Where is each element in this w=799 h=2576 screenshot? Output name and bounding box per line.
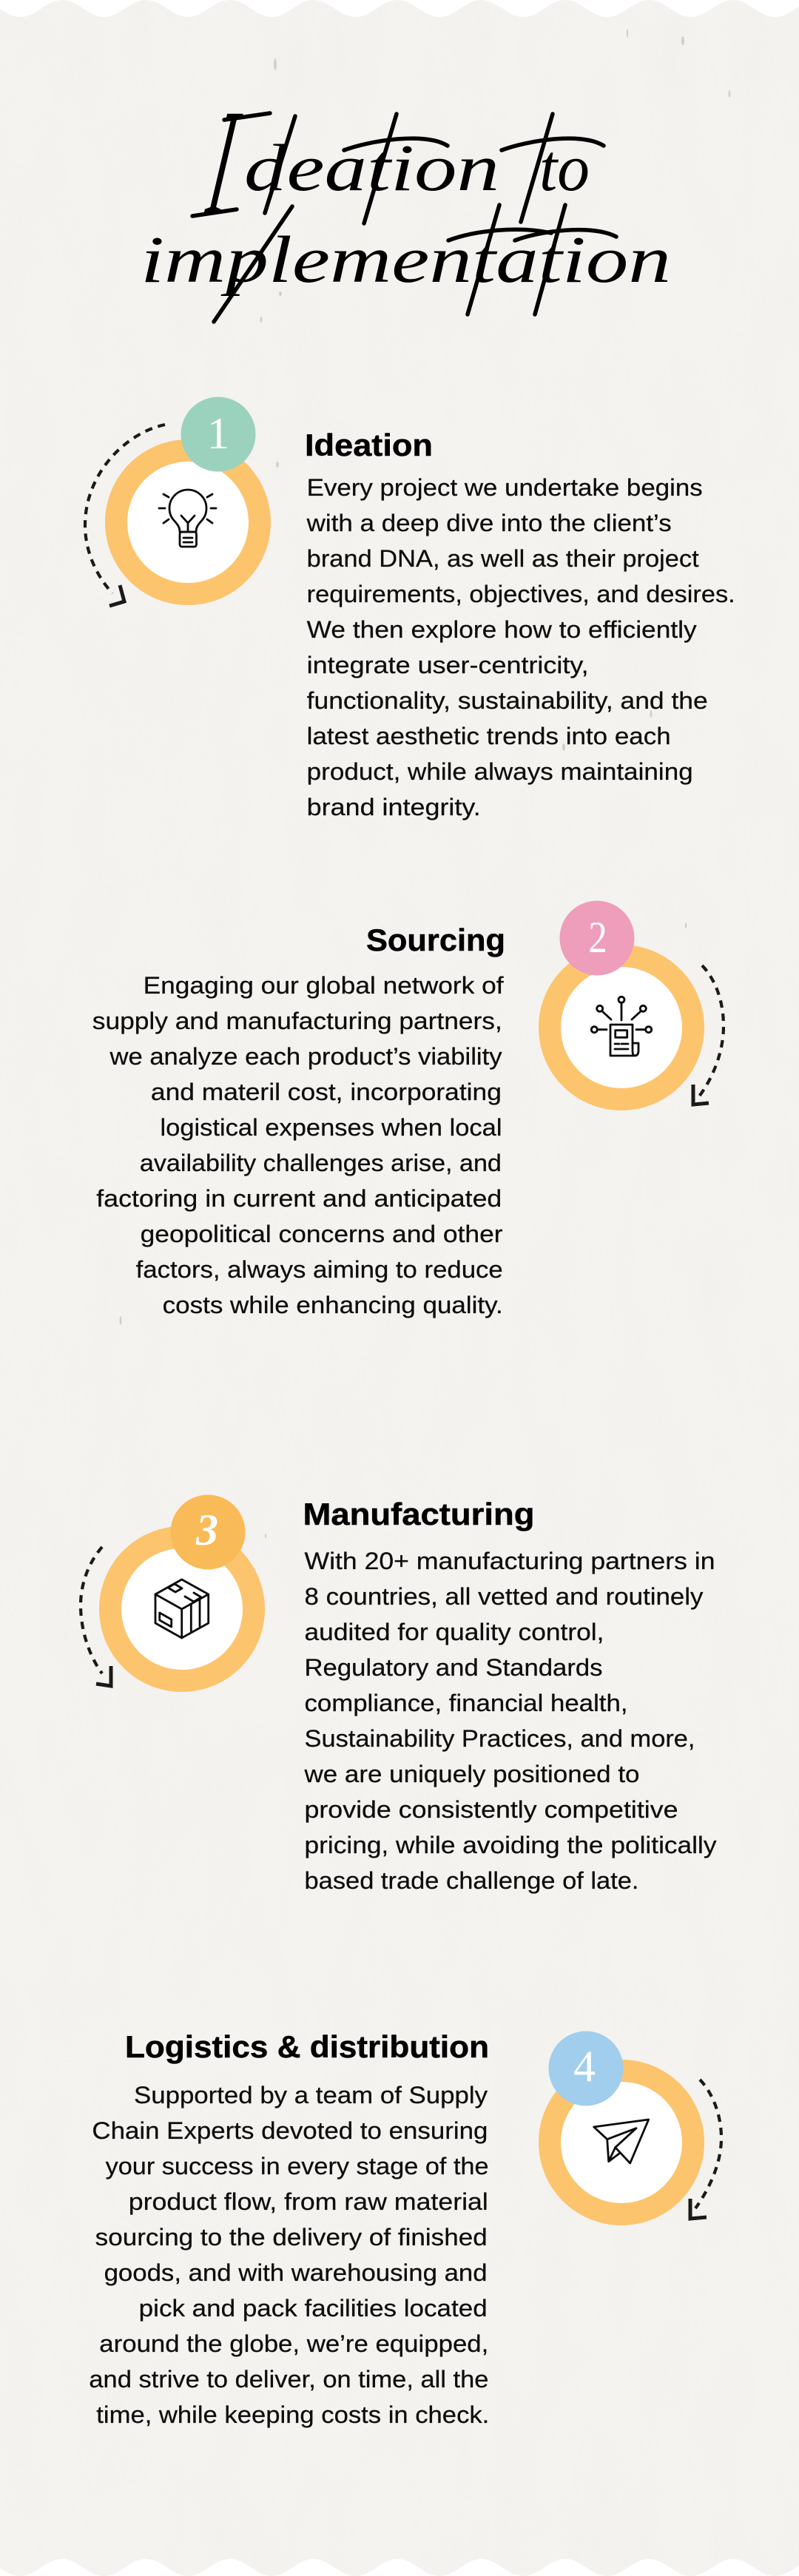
text block: logistics and distribution: time, while keeping costs in check. [96, 2401, 489, 2428]
text block: logistics and distribution: product flow, from raw material [129, 2188, 488, 2215]
text block: ideation: integrate user-centricity, [307, 652, 589, 678]
text block: manufacturing: based trade challenge of late. [305, 1867, 639, 1894]
text block: ideation: We then explore how to efficiently [307, 616, 698, 643]
badge 3 [170, 1494, 246, 1570]
text block: ideation: functionality, sustainability, and the [307, 687, 708, 714]
ring 1 [116, 451, 260, 594]
text block: sourcing: we analyze each product’s viability [109, 1043, 502, 1070]
dashed arrow 4 [690, 2080, 721, 2219]
panel: step 3 manufacturing [81, 1494, 717, 1894]
text block: ideation: latest aesthetic trends into each [307, 723, 671, 749]
text block: logistics and distribution: around the globe, we’re equipped, [99, 2330, 488, 2357]
text block: manufacturing: Regulatory and Standards [305, 1654, 602, 1681]
icon: paper plane [594, 2120, 649, 2163]
text block: manufacturing: 8 countries, all vetted and routinely [305, 1583, 704, 1610]
text block: logistics and distribution: goods, and with warehousing and [104, 2259, 488, 2286]
panel: step 2 sourcing [92, 901, 724, 1318]
icon group: step 2 ring and badge [550, 901, 724, 1105]
text block: ideation: with a deep dive into the client’s [306, 510, 672, 536]
text block: manufacturing: With 20+ manufacturing partners in [305, 1548, 715, 1574]
text block: ideation: requirements, objectives, and desires. [307, 581, 735, 607]
text block: sourcing: logistical expenses when local [160, 1114, 502, 1141]
badge 2: 2 [588, 913, 607, 962]
panel: step 1 ideation [85, 397, 735, 820]
heading: ideation: Ideation [305, 428, 433, 462]
text block: manufacturing [303, 1548, 717, 1894]
icon: package box [155, 1579, 209, 1638]
text block: sourcing: geopolitical concerns and other [141, 1221, 503, 1247]
text block: manufacturing: Sustainability Practices, and more, [305, 1725, 695, 1752]
text block: manufacturing: we are uniquely positioned to [303, 1761, 639, 1787]
ring 3 [110, 1537, 254, 1681]
heading: logistics and distribution: Logistics & distribution [125, 2029, 489, 2064]
text block: sourcing [92, 972, 505, 1318]
text block: manufacturing: pricing, while avoiding the politically [305, 1832, 717, 1858]
text block: logistics and distribution [89, 2082, 489, 2428]
text block: sourcing: and materil cost, incorporating [151, 1079, 502, 1105]
text block: sourcing: factoring in current and anticipated [96, 1185, 502, 1212]
badge 3: 3 [195, 1506, 218, 1554]
badge 1: 1 [207, 409, 229, 458]
text block: logistics and distribution: your success in every stage of the [106, 2153, 489, 2179]
text block: sourcing: costs while enhancing quality. [163, 1292, 503, 1318]
title line one: deation [244, 132, 499, 205]
icon group: step 3 ring and badge [81, 1494, 254, 1686]
dashed arrow 2 [693, 965, 724, 1105]
text block: logistics and distribution: pick and pack facilities located [139, 2295, 488, 2322]
text block: sourcing: supply and manufacturing partners, [92, 1008, 502, 1034]
title line one: to [539, 132, 590, 205]
panel: step 4 logistics and distribution [89, 2029, 721, 2428]
heading: manufacturing: Manufacturing [303, 1497, 534, 1531]
dashed arrow 1 [85, 425, 165, 606]
text block: logistics and distribution: and strive to deliver, on time, all the [89, 2366, 488, 2393]
badge 4: 4 [573, 2042, 596, 2091]
text block: ideation: brand DNA, as well as their project [307, 545, 699, 572]
icon group: step 4 ring and badge [549, 2032, 721, 2219]
icon group: step 1 ring and badge [85, 397, 260, 606]
heading: sourcing: Sourcing [366, 923, 505, 957]
text block: ideation: product, while always maintaining [307, 758, 693, 785]
text block: manufacturing: audited for quality control, [305, 1619, 604, 1645]
title flourishes [192, 113, 616, 322]
text block: sourcing: availability challenges arise, and [140, 1150, 502, 1176]
icon: network document [591, 997, 652, 1056]
badge 4 [549, 2032, 623, 2105]
badge 1 [181, 397, 256, 472]
text block: ideation: Every project we undertake begins [307, 474, 703, 501]
text block: manufacturing: compliance, financial health, [305, 1690, 627, 1716]
text block: sourcing: factors, always aiming to reduce [136, 1256, 503, 1283]
text block: logistics and distribution: Chain Experts devoted to ensuring [92, 2117, 488, 2144]
text block: ideation: brand integrity. [307, 794, 481, 820]
text block: manufacturing: provide consistently competitive [305, 1796, 678, 1823]
icon: light bulb [159, 490, 216, 547]
text block: logistics and distribution: Supported by a team of Supply [134, 2082, 488, 2108]
title [141, 78, 671, 322]
text block: sourcing: Engaging our global network of [144, 972, 505, 999]
text block: logistics and distribution: sourcing to the delivery of finished [95, 2224, 488, 2250]
ring 2 [550, 956, 693, 1099]
title line two: implementation [141, 223, 671, 297]
badge 2 [559, 901, 635, 975]
text block: ideation [306, 474, 735, 820]
dashed arrow 3 [81, 1547, 111, 1686]
ring 4 [550, 2071, 693, 2214]
title capital I: I [198, 78, 249, 246]
